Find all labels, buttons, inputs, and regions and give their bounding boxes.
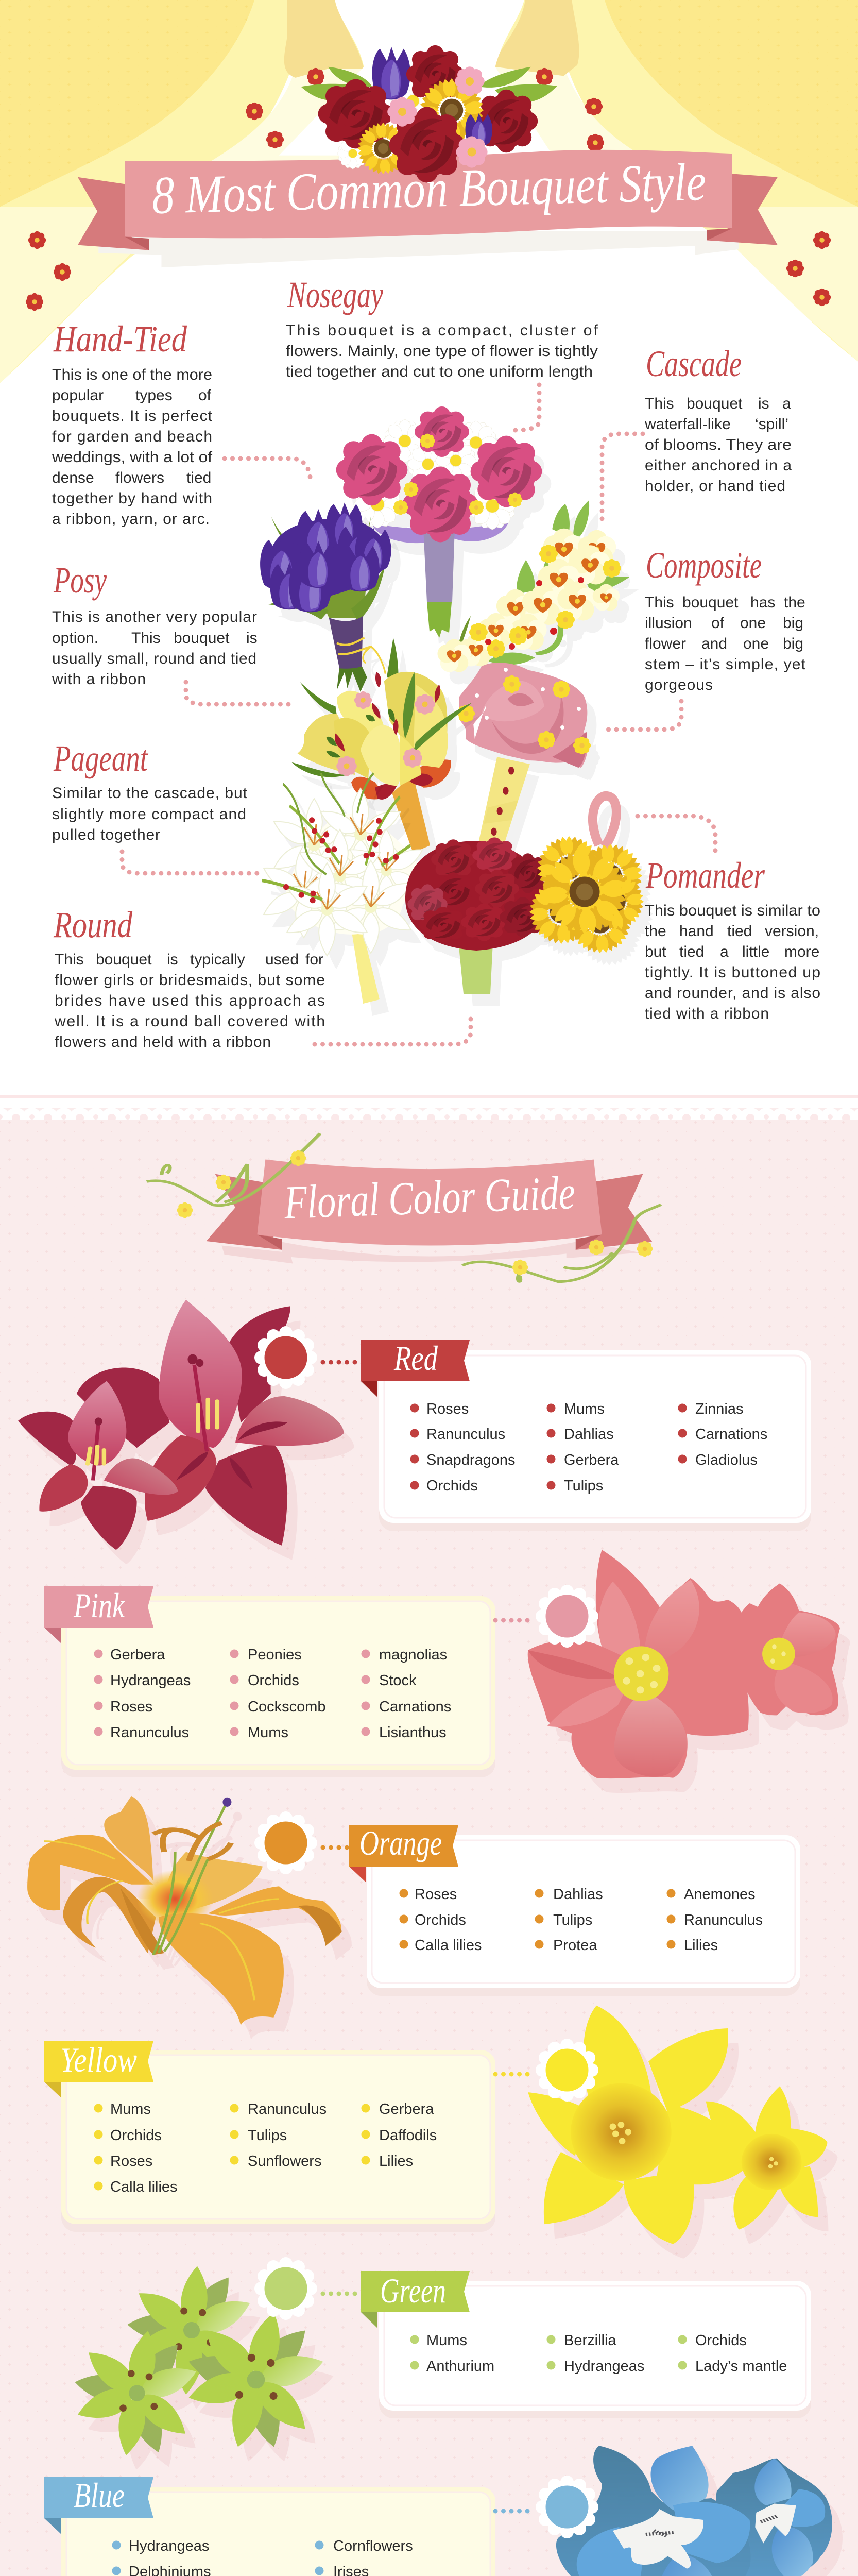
tag: Red [361,1338,470,1397]
description: option. [52,630,98,647]
flower list: Cockscomb [248,1699,325,1715]
badge [536,2476,598,2538]
flower list: Orchids [426,1478,478,1494]
flower list: Ranunculus [426,1426,505,1443]
top bouquet [301,45,557,184]
color card: green [254,2257,811,2418]
badge [254,1326,317,1389]
tag: Pink [44,1586,153,1643]
description: the [784,594,805,611]
flower: blue [556,2446,832,2576]
flower list: Roses [110,1699,152,1715]
description [644,395,792,495]
description: tied together and cut to one uniform length [286,363,593,380]
color card: orange [254,1811,800,1996]
description: a [720,943,729,960]
tag: Blue [44,2476,153,2534]
tag: Yellow: Yellow [60,2040,137,2079]
description: This bouquet is similar to [645,902,820,919]
connector [323,2292,358,2296]
flower list: Sunflowers [248,2153,321,2170]
flower: pink [528,1550,840,1778]
badge [254,2257,317,2320]
flower list: Orchids [415,1912,466,1928]
small yellow flowers [177,1150,653,1275]
round text block [53,904,325,1050]
flower list: Tulips [248,2127,287,2144]
flower list: Tulips [553,1912,592,1928]
flower list: Lilies [379,2153,413,2170]
description: the [645,923,666,940]
flower list: Gerbera [564,1452,619,1468]
connector [323,1845,348,1850]
flower: yellow daffodils [528,2006,827,2244]
description: either anchored in a [645,457,792,474]
ribbon title: Floral Color Guide [283,1166,576,1229]
description: is [758,395,769,412]
flower list: Calla lilies [415,1937,482,1954]
description [645,594,806,693]
tag: Green: Green [380,2271,446,2310]
bouquet: composite rose with yellow stem [457,663,591,842]
description: has [750,594,775,611]
tag: Yellow [44,2040,153,2098]
description [52,366,213,528]
description: version, [765,923,819,940]
description: holder, or hand tied [645,478,785,495]
flower list: Lisianthus [379,1724,447,1741]
bouquet: hand-tied tulips [260,502,391,692]
flower list: Peonies [248,1647,302,1663]
bouquet: red round [405,837,548,994]
heading: Hand-Tied: Hand-Tied [53,318,187,360]
ribbon shape [147,1133,661,1282]
stems and leaves [268,511,389,692]
description: illusion [645,615,692,632]
description: ‘spill’ [755,416,788,433]
flower list: Lady’s mantle [695,2358,787,2375]
cascade text block [644,343,792,495]
flower list [410,1401,767,1494]
bouquet: pageant yellow tulips [291,638,472,853]
flower list: Hydrangeas [564,2358,644,2375]
badge [536,2039,598,2102]
description: big [783,635,803,652]
flower list: Orchids [248,1672,299,1689]
flower list: magnolias [379,1647,447,1663]
flower list: Roses [426,1401,469,1417]
tag: Red: Red [393,1338,438,1378]
connector [495,2072,531,2076]
dotted connectors to bouquets [122,385,715,1044]
flower list: Cornflowers [333,2538,413,2554]
heading: Nosegay: Nosegay [287,274,383,315]
description: for garden and beach [52,428,212,445]
connector [323,1360,358,1364]
description: used [265,951,299,968]
flower: red lily [18,1300,344,1550]
flower list: Mums [110,2101,151,2117]
color card: blue [44,2476,598,2576]
color card: yellow [44,2039,598,2232]
description [54,951,325,1050]
description: bouquet [687,395,743,412]
flower list: Roses [110,2153,152,2170]
description: of [711,615,725,632]
tag: Blue: Blue [74,2476,125,2515]
description [286,322,598,380]
leaves [301,67,557,103]
description: This [55,951,84,968]
description: bouquet [96,951,152,968]
title text: 8 Most Common Bouquet Style [151,152,707,225]
card panel [61,2050,495,2232]
card panel [379,2281,811,2418]
flower list: Ranunculus [110,1724,189,1741]
tag: Orange: Orange [359,1823,442,1862]
heading: Pageant: Pageant [53,738,149,779]
flower list [410,2332,787,2375]
description: bouquet [174,630,230,647]
description [645,902,820,1022]
flower: orange lily [27,1796,342,2025]
posy text block [52,560,258,688]
bouquet: pomander sunflowers [517,796,655,965]
bouquet: nosegay [336,406,542,638]
flower list: Ranunculus [684,1912,763,1928]
heading: Composite: Composite [646,545,762,586]
description: This [645,594,674,611]
composite text block [645,545,806,693]
description: a ribbon, yarn, or arc. [52,511,210,528]
flower list: Gladiolus [695,1452,758,1468]
card panel [367,1835,800,1996]
description: with a ribbon [52,671,146,688]
description: tied [679,943,704,960]
description: flower girls or bridesmaids, but some [55,972,325,989]
flower list: Anemones [684,1886,756,1903]
flower list: Dahlias [553,1886,603,1903]
flower list: Dahlias [564,1426,614,1443]
flower list: Calla lilies [110,2179,178,2195]
description: gorgeous [645,676,713,693]
ribbon loop [593,796,616,847]
heading: Cascade: Cascade [646,343,742,384]
description [52,785,248,843]
flower list: Berzillia [564,2332,616,2349]
badge [254,1811,317,1874]
description: This is one of the more [52,366,212,383]
description: waterfall-like [644,416,731,433]
rose head [459,663,588,768]
description: This bouquet is a compact, cluster of [286,322,598,339]
stem [478,757,530,842]
connector [495,2509,531,2513]
description: flower [645,635,686,652]
description: for [305,951,323,968]
description: well. It is a round ball covered with [54,1013,325,1030]
flower list: Mums [564,1401,605,1417]
description [52,608,258,688]
description: usually small, round and tied [52,650,256,667]
green sprigs with red berries [262,773,410,903]
stem [459,943,493,994]
flower list: Lilies [684,1937,718,1954]
flower list: Protea [553,1937,597,1954]
description: flowers and held with a ribbon [55,1033,271,1050]
ribbon and stem [372,518,510,638]
floral guide background [0,1095,858,2576]
flower: green [64,2261,339,2466]
color card: red [254,1326,811,1531]
pomander text block [645,855,820,1022]
description: together by hand with [52,490,212,507]
heading: Round: Round [53,904,133,945]
description: types [135,387,173,404]
description: little [742,943,769,960]
description: one [743,635,769,652]
flower list: Gerbera [110,1647,165,1663]
flower list: Roses [415,1886,457,1903]
description: This is another very popular [52,608,257,625]
flower list: Snapdragons [426,1452,516,1468]
description: big [783,615,803,632]
badge [536,1585,598,1648]
description: flowers. Mainly, one type of flower is tightly [286,343,598,360]
flower list: Hydrangeas [129,2538,209,2554]
description: brides have used this approach as [55,992,325,1009]
tag: Pink: Pink [73,1586,125,1625]
description: and [701,635,727,652]
floral color guide ribbon [147,1133,661,1282]
description: typically [190,951,245,968]
description: is [246,630,258,647]
flower list: Hydrangeas [110,1672,191,1689]
description: Similar to the cascade, but [52,785,248,802]
vines [147,1133,320,1206]
description: weddings, with a lot of [52,449,213,466]
decorative blossoms on veil [26,68,831,311]
flower list: Anthurium [426,2358,494,2375]
flower list: Mums [426,2332,467,2349]
title ribbon [78,150,778,267]
description: tied [727,923,752,940]
heading: Posy: Posy [53,560,107,601]
description: hand [679,923,714,940]
flower list: Orchids [110,2127,162,2144]
heading: Pomander: Pomander [645,855,765,896]
description: bouquets. It is perfect [52,408,213,425]
description: This [131,630,161,647]
flower list [400,1886,763,1954]
flower list: Zinnias [695,1401,744,1417]
pageant text block [52,738,248,843]
flower list [94,1647,451,1741]
tag: Orange [349,1823,458,1883]
header scene: bride and veil [0,0,858,405]
description: pulled together [52,826,160,843]
description: bouquet [682,594,739,611]
description: a [782,395,791,412]
color card: pink [44,1585,598,1777]
flower list: Daffodils [379,2127,437,2144]
flower list: Orchids [695,2332,747,2349]
description: slightly more compact and [52,806,246,823]
card panel [61,2487,495,2576]
flower list [112,2538,413,2576]
leaves [458,500,630,665]
description: of [198,387,212,404]
description: dense [52,469,94,486]
hand-tied text block [52,318,213,528]
bouquet: white lilies [260,773,426,1004]
flower list: Ranunculus [248,2101,327,2117]
description: more [784,943,819,960]
description: and rounder, and is also [645,985,820,1002]
flower list: Tulips [564,1478,603,1494]
description: tied with a ribbon [645,1005,769,1022]
card panel [379,1350,811,1531]
description: stem – it’s simple, yet [645,656,806,673]
description: flowers [115,469,164,486]
description: tightly. It is buttoned up [645,964,820,981]
flower list: Gerbera [379,2101,434,2117]
flower list: Carnations [695,1426,767,1443]
description: This [645,395,674,412]
description: is [167,951,178,968]
flower list [94,2101,437,2195]
flower list: Carnations [379,1699,451,1715]
flower list: Mums [248,1724,288,1741]
flower list: Stock [379,1672,417,1689]
description: but [645,943,666,960]
description: of blooms. They are [645,436,792,453]
description: one [740,615,766,632]
bouquet: cascade [437,500,630,672]
card panel [61,1596,495,1777]
connector [495,1618,531,1623]
description: popular [52,387,104,404]
stem [350,922,380,1004]
nosegay text block [286,274,598,380]
description: tied [186,469,211,486]
tag: Green [361,2271,470,2328]
